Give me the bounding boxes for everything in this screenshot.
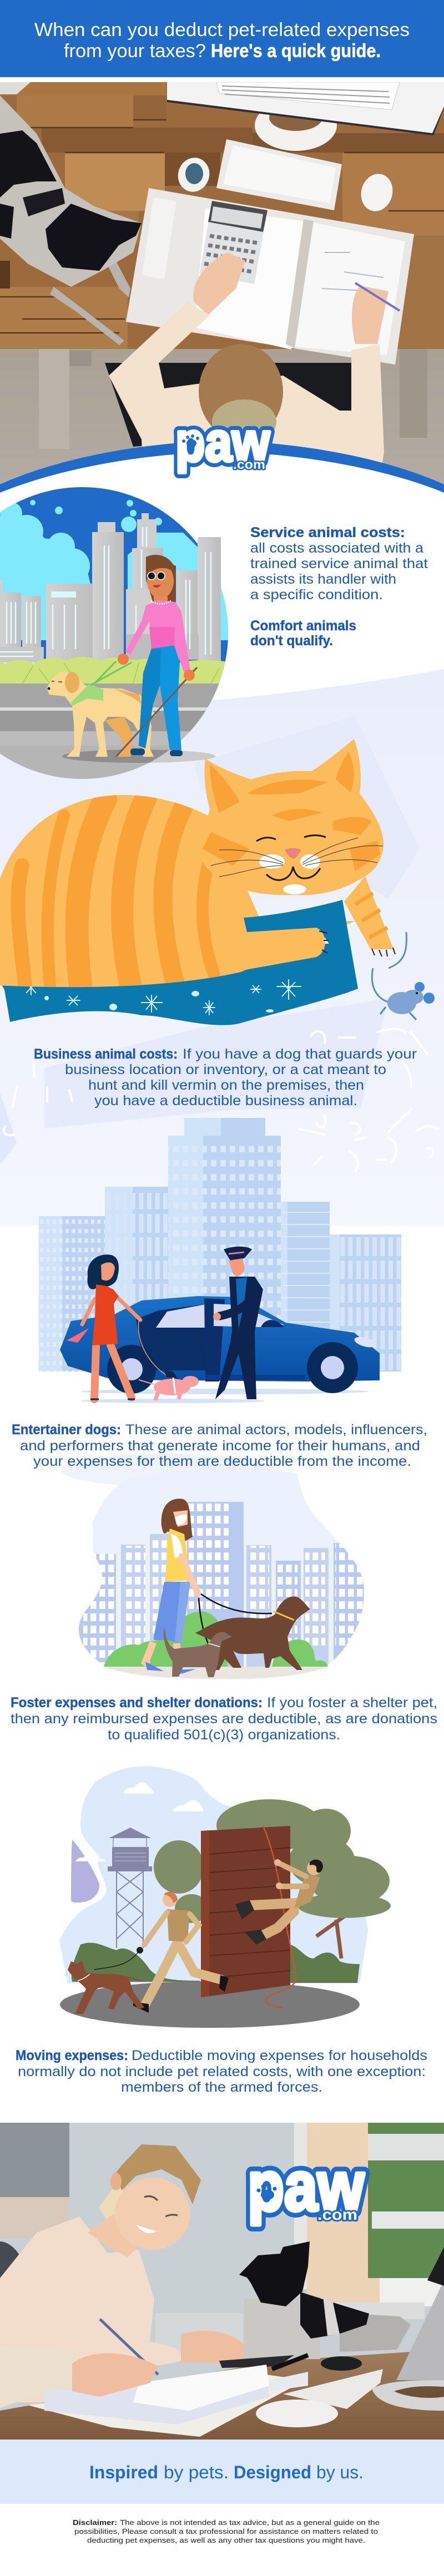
lavender shape: [71, 1840, 99, 1902]
monitor: [372, 2247, 444, 2411]
tagline: by us.: [316, 2462, 364, 2482]
foster text: Foster expenses and shelter donations:: [11, 1695, 263, 1710]
blanket: [0, 943, 358, 1025]
blue arc and white body: [0, 441, 444, 721]
clouds: [0, 500, 233, 644]
floor: [0, 349, 444, 493]
moving text: normally do not include pet related costs, with one exception:: [18, 2064, 426, 2079]
business animal text: hunt and kill vermin on the premises, then: [88, 1077, 364, 1093]
disclaimer: Disclaimer:: [73, 2518, 117, 2527]
hands: [193, 252, 245, 315]
monitor: [167, 82, 444, 151]
woman from above: [109, 302, 384, 463]
illustration: sleeping cat on blanket: [0, 739, 435, 1025]
service animal text: Comfort animals: [250, 618, 356, 634]
business animal text: If you have a dog that guards your: [183, 1046, 417, 1062]
foster text: If you foster a shelter pet,: [267, 1695, 437, 1710]
paw icon: [182, 434, 199, 447]
dog from above: [0, 82, 142, 345]
body: [0, 795, 355, 987]
business animal text: business location or inventory, or a cat meant to: [65, 1062, 386, 1077]
illustration: foster dog walking: [78, 1467, 367, 1679]
entertainer text: your expenses for them are deductible from the income.: [33, 1454, 411, 1469]
paperclip holder: [178, 158, 210, 192]
leashes: [199, 1594, 272, 1643]
bushes: [104, 1612, 327, 1667]
car: [60, 1296, 380, 1394]
binder: [126, 188, 414, 365]
illustration: woman with cane: [116, 555, 197, 757]
service animal text: [250, 525, 428, 649]
calculator and tape: [219, 2355, 362, 2371]
writing hand: [72, 2353, 158, 2397]
service animal text: all costs associated with a: [250, 540, 423, 556]
wall: [0, 2123, 432, 2411]
foster text: to qualified 501(c)(3) organizations.: [108, 1727, 340, 1743]
woman with mask: [145, 1499, 198, 1674]
title: from your taxes?: [64, 41, 206, 62]
road: [0, 684, 233, 707]
mouse: [372, 932, 435, 1020]
rope: [263, 1826, 296, 2008]
small dog: [164, 1626, 232, 1677]
road shadows: [80, 1389, 369, 1394]
business animal text: Business animal costs:: [34, 1046, 178, 1062]
bottom photo: woman at desk with dog: [0, 2123, 444, 2440]
keyboard and mouse: [256, 2369, 383, 2427]
tagline: Inspired: [89, 2462, 158, 2482]
mouse: [361, 174, 393, 211]
head: [201, 739, 384, 895]
service animal text: trained service animal that: [250, 556, 428, 571]
paw icon: [256, 2184, 276, 2200]
service animal text: don't qualify.: [250, 633, 333, 649]
foster text: then any reimbursed expenses are deductible, as are donations: [11, 1711, 437, 1727]
top photo: woman at desk with dog: [0, 82, 444, 494]
big brown dog: [195, 1596, 310, 1670]
title: Here's a quick guide.: [211, 41, 381, 62]
tagline band: [0, 2440, 444, 2504]
entertainer text: These are animal actors, models, influencers,: [125, 1422, 427, 1438]
disclaimer: The above is not intended as tax advice, but as a general guide on the: [120, 2518, 380, 2527]
watch tower: [108, 1828, 152, 1948]
illustration: car with woman, chauffeur and pig: [60, 1247, 380, 1403]
tagline: Designed: [234, 2462, 311, 2482]
disclaimer: possibilities, Please consult a tax professional for assistance on matters related to: [74, 2527, 378, 2535]
climbing man: [235, 1859, 323, 1945]
tagline: [89, 2462, 364, 2482]
moving text: members of the armed forces.: [121, 2079, 322, 2095]
illustration: guide dog: [47, 661, 156, 757]
logo: paw.com bottom: .com: [317, 2206, 357, 2223]
window and curtain: [294, 2123, 444, 2319]
business animal text: you have a deductible business animal.: [94, 1093, 357, 1109]
tagline: by pets.: [164, 2462, 229, 2482]
road shadow beyond circle: [62, 750, 215, 763]
logo: paw.com top: paw: [175, 411, 270, 473]
leash and dog: [68, 1951, 147, 2014]
moving text: Moving expenses:: [16, 2048, 128, 2063]
entertainer text: [12, 1422, 427, 1487]
service animal text: a specific condition.: [250, 587, 383, 603]
disclaimer: [73, 2518, 380, 2544]
tree: [154, 1799, 391, 1958]
keyboard: [216, 139, 342, 210]
blanket fold: [244, 900, 358, 993]
logo: paw.com bottom: paw: [248, 2147, 365, 2225]
ground: [104, 1667, 327, 1679]
moving text: [16, 2048, 427, 2095]
harness: [71, 684, 103, 706]
entertainer text: and performers that generate income for their humans, and: [20, 1438, 420, 1454]
clouds: [75, 1782, 204, 1861]
logo: paw.com bottom: paw: [248, 2147, 365, 2225]
woman: [0, 2144, 249, 2408]
illustration: city skyline: [39, 1118, 401, 1371]
woman in red dress: [67, 1254, 140, 1399]
dog: [239, 2241, 411, 2359]
service animal text: assists its handler with: [250, 571, 396, 587]
forepaw: [233, 928, 325, 972]
business animal text: [34, 1046, 417, 1109]
wall: [201, 1826, 290, 1997]
table: [0, 2350, 444, 2440]
title: [34, 19, 410, 62]
ground: [60, 1981, 360, 2028]
dark chair: [0, 2241, 19, 2280]
illustration: service animal circle scene: [0, 483, 233, 785]
desk wood: [0, 82, 444, 349]
disclaimer: deducting pet expenses, as well as any other tax questions you might have.: [87, 2536, 365, 2544]
hedge: [0, 657, 233, 684]
right arm: [344, 876, 395, 956]
bushes: [72, 1943, 360, 1983]
binder and papers: [28, 2365, 308, 2437]
buildings: [78, 1502, 367, 1667]
buildings: [0, 513, 221, 662]
service animal text: Service animal costs:: [250, 525, 405, 540]
logo: paw.com top: .com: [233, 457, 265, 472]
moving text: Deductible moving expenses for households: [132, 2048, 427, 2063]
illustration: military training: [59, 1766, 391, 2028]
pale background panel: [0, 669, 444, 1226]
title: When can you deduct pet-related expenses: [34, 19, 410, 41]
sky blob: [59, 1766, 368, 1983]
header banner: [0, 0, 444, 77]
calculator: [200, 201, 268, 284]
leash: [90, 661, 132, 685]
chair: [105, 363, 355, 447]
entertainer text: Entertainer dogs:: [12, 1422, 121, 1438]
pig on leash: [138, 1321, 199, 1400]
logo: paw.com top: paw: [175, 411, 270, 473]
foster text: [11, 1695, 437, 1743]
running man: [133, 1892, 229, 2013]
chauffeur: [213, 1247, 263, 1399]
